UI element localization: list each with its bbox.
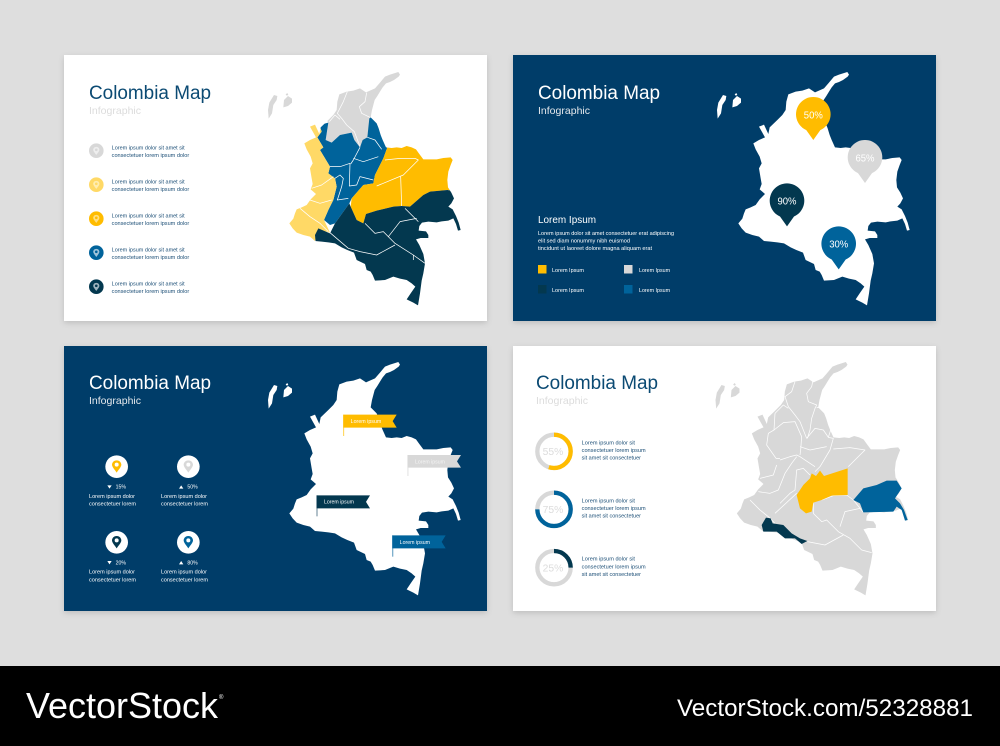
text block: tincidunt ut laoreet dolore magna aliquam erat — [538, 246, 652, 252]
title: Colombia Map — [538, 83, 660, 104]
stat: 15%: consectetuer lorem — [89, 502, 136, 508]
legend item yellow: Lorem ipsum dolor sit amet sit — [112, 213, 185, 219]
map with flags — [268, 362, 461, 595]
legend item blue: consectetuer lorem ipsum dolor — [112, 255, 189, 261]
stat: 15%: 15% — [116, 485, 126, 491]
stat: 20%: Lorem ipsum dolor — [89, 570, 135, 576]
text block: Lorem Ipsum — [538, 215, 596, 226]
legend item blue — [89, 245, 189, 261]
legend list — [89, 143, 189, 295]
legend item dark: consectetuer lorem ipsum dolor — [112, 289, 189, 295]
donut: 75% — [537, 493, 646, 526]
pin: 65% — [848, 140, 882, 183]
title: Colombia Map — [536, 373, 658, 394]
stat: 80%: 80% — [187, 560, 198, 566]
donut: 75%: sit amet sit consectetuer — [582, 514, 641, 520]
donut: 55% — [537, 435, 646, 468]
legend item light yellow — [89, 177, 189, 193]
legend item dark — [89, 279, 189, 295]
subtitle: Infographic — [538, 105, 590, 117]
donut: 75%: 75% — [543, 505, 563, 516]
legend item gray: consectetuer lorem ipsum dolor — [112, 153, 189, 159]
pin: 90% — [770, 183, 804, 226]
legend: Lorem Ipsum — [639, 268, 670, 274]
map: coloured regions — [268, 67, 467, 313]
donut: 75%: consectetuer lorem ipsum — [582, 506, 646, 512]
panel: regional map — [64, 55, 487, 321]
donut: 55%: sit amet sit consectetuer — [582, 456, 641, 462]
footer bar — [0, 666, 1000, 746]
flag: yellow: Lorem ipsum — [351, 419, 382, 425]
region: dark — [762, 518, 807, 544]
stat: 80%: consectetuer lorem — [161, 577, 208, 583]
stat: 15%: Lorem ipsum dolor — [89, 494, 135, 500]
legend: Lorem Ipsum — [639, 288, 670, 294]
stat: 50%: Lorem ipsum dolor — [161, 494, 207, 500]
donut: 25%: sit amet sit consectetuer — [582, 572, 641, 578]
pin: 30% — [821, 226, 856, 269]
panel: donut map — [513, 346, 936, 611]
subtitle: Infographic — [89, 105, 141, 117]
text block: elit sed diam nonummy nibh euismod — [538, 238, 630, 244]
pin: 65%: 65% — [856, 152, 874, 164]
donut: 25%: 25% — [543, 563, 563, 574]
donut: 55%: Lorem ipsum dolor sit — [582, 440, 635, 446]
legend item yellow — [89, 211, 189, 227]
flag: dark: Lorem ipsum — [324, 500, 354, 506]
flag: blue: Lorem ipsum — [400, 540, 430, 546]
flag: dark — [316, 495, 370, 516]
pin: 30%: 30% — [829, 239, 848, 251]
donut: 25%: consectetuer lorem ipsum — [582, 564, 646, 570]
legend item dark: Lorem ipsum dolor sit amet sit — [112, 281, 185, 287]
panel: flag map — [64, 346, 487, 611]
legend item blue: Lorem ipsum dolor sit amet sit — [112, 247, 185, 253]
flag: gray: Lorem ipsum — [415, 459, 445, 465]
map: gray with highlighted regions — [715, 362, 908, 595]
legend item gray: Lorem ipsum dolor sit amet sit — [112, 145, 185, 151]
stat: 80% — [161, 531, 208, 583]
flag: gray — [407, 455, 461, 476]
pin: 50%: 50% — [804, 109, 823, 121]
legend item yellow: consectetuer lorem ipsum dolor — [112, 221, 189, 227]
stat: 20%: consectetuer lorem — [89, 577, 136, 583]
registered mark: ® — [219, 694, 224, 701]
legend item light yellow: consectetuer lorem ipsum dolor — [112, 187, 189, 193]
brand wordmark: VectorStock — [26, 685, 219, 726]
text block — [538, 215, 674, 252]
stat: 50%: consectetuer lorem — [161, 502, 208, 508]
title: Colombia Map — [89, 83, 211, 104]
title: Colombia Map — [89, 373, 211, 394]
donut list — [537, 435, 646, 584]
donut: 55%: consectetuer lorem ipsum — [582, 448, 646, 454]
stat: 20% — [89, 531, 136, 583]
legend item light yellow: Lorem ipsum dolor sit amet sit — [112, 179, 185, 185]
stat: 20%: 20% — [116, 560, 126, 566]
region: blue — [853, 481, 908, 521]
stat: 50% — [161, 455, 208, 508]
panel: pin map — [513, 55, 936, 321]
region: yellow — [797, 468, 848, 513]
image id: VectorStock.com/52328881 — [677, 695, 973, 722]
subtitle: Infographic — [536, 395, 588, 407]
flag: blue — [392, 535, 446, 557]
donut: 75%: Lorem ipsum dolor sit — [582, 498, 635, 504]
stat grid — [89, 455, 208, 583]
legend: Lorem Ipsum — [552, 268, 585, 274]
donut: 25% — [537, 551, 646, 584]
map: silhouette — [717, 72, 910, 305]
text block: Lorem ipsum dolor sit amet consectetuer erat adipiscing — [538, 231, 674, 237]
flag: yellow — [343, 415, 397, 436]
pin: 50% — [796, 97, 831, 140]
stat: 50%: 50% — [187, 485, 198, 491]
legend — [538, 265, 670, 294]
legend item gray — [89, 143, 189, 159]
subtitle: Infographic — [89, 395, 141, 407]
legend: Lorem Ipsum — [552, 288, 585, 294]
donut: 55%: 55% — [543, 447, 563, 458]
stat: 80%: Lorem ipsum dolor — [161, 570, 207, 576]
donut: 25%: Lorem ipsum dolor sit — [582, 557, 635, 563]
pin: 90%: 90% — [778, 196, 796, 208]
stat: 15% — [89, 455, 136, 508]
